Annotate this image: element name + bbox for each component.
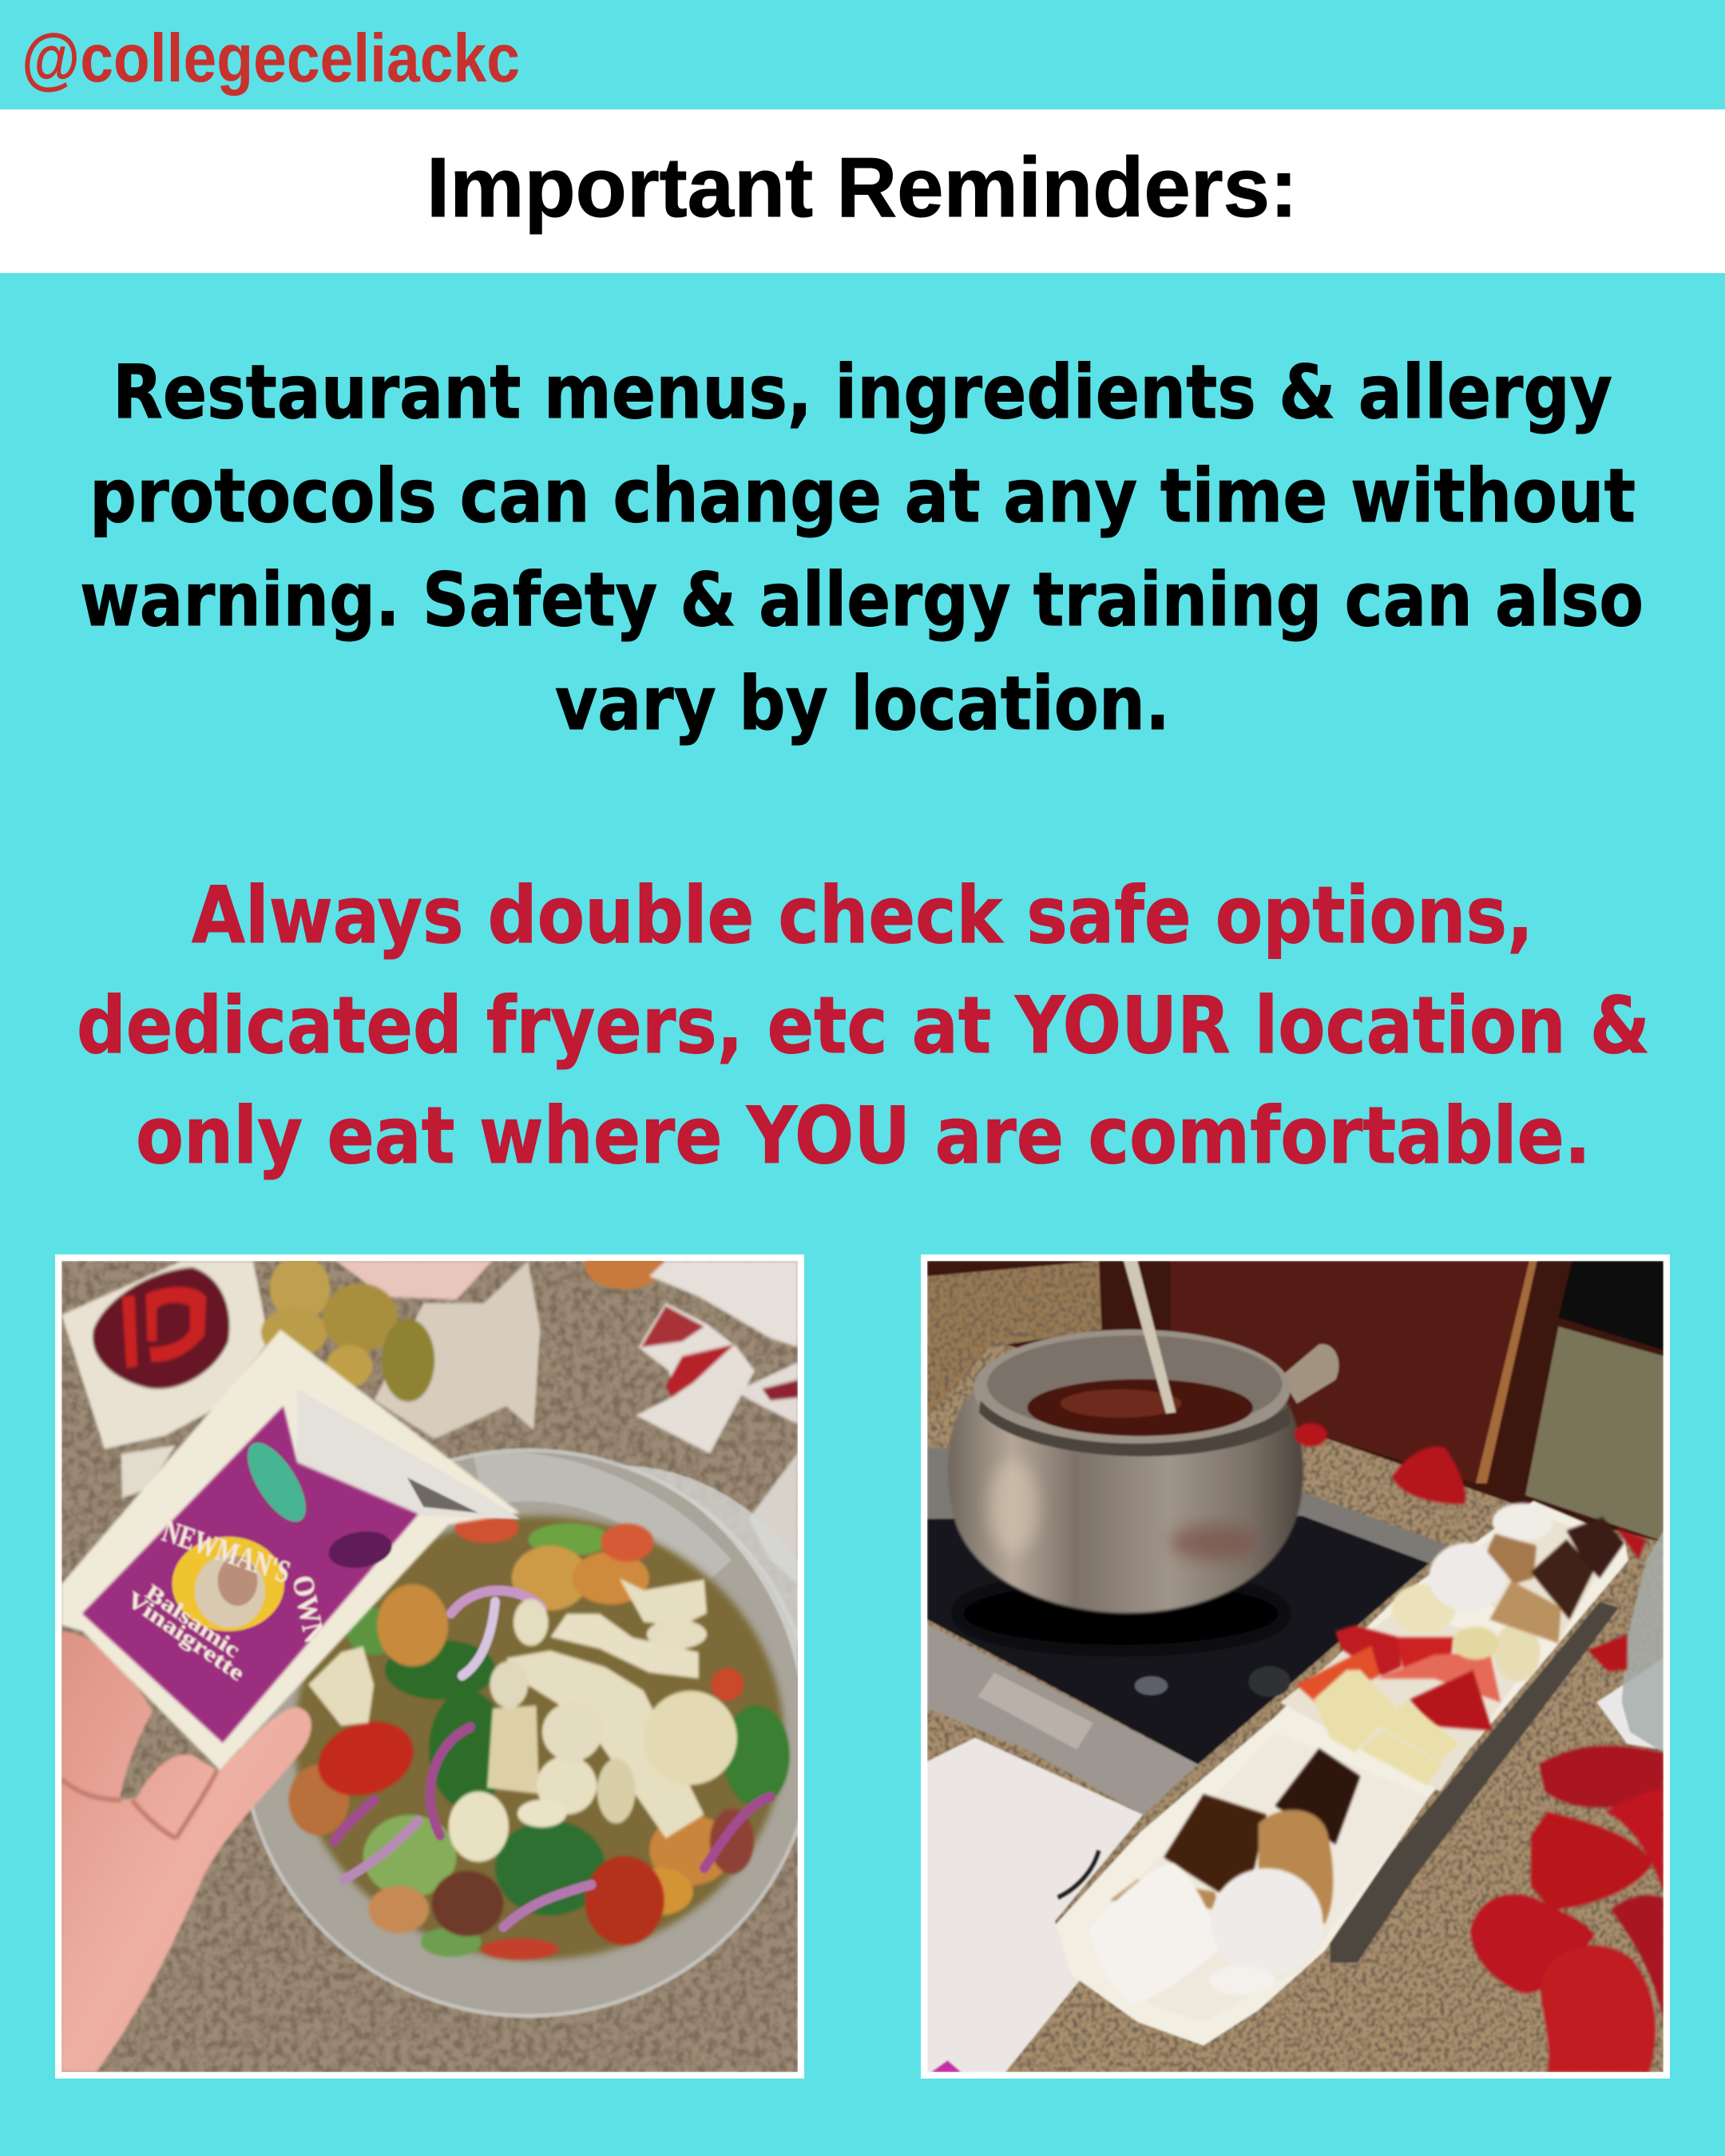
drinking glass: [1597, 1531, 1664, 1753]
grilled chicken: [308, 1578, 737, 1862]
granite counter: [927, 1261, 1664, 2072]
text block: reminder paragraph: [80, 349, 1644, 747]
packet label: [236, 1433, 316, 1532]
salad bowl: [242, 1450, 815, 2016]
hand: [61, 1631, 311, 2072]
bananas: [1314, 1584, 1541, 1785]
packet text: OWN: [286, 1572, 331, 1647]
red onion: [335, 1591, 771, 1927]
cup: [61, 1261, 269, 1498]
social handle: @collegeceliackc: [22, 21, 520, 97]
photo: chocolate fondue platter: [921, 1254, 1670, 2079]
rose petals: [1295, 1423, 1664, 2072]
fried tots and napkin: [261, 1255, 541, 1439]
tray shadow: [1330, 1602, 1619, 1963]
carpet: [61, 1261, 798, 2072]
dressing packet: [61, 1330, 520, 1770]
tomatoes: [311, 1512, 744, 1960]
wrappers: [585, 1242, 798, 1584]
title banner: [0, 109, 1725, 273]
text block: reminder paragraph: vary by location.: [555, 660, 1170, 747]
lettuce: [347, 1523, 790, 1956]
shredded cheese: [289, 1545, 754, 1936]
onion illustration: [327, 1528, 395, 1572]
marshmallows: [1089, 1863, 1322, 2005]
text block: red warning: only eat where YOU are comfortable.: [136, 1091, 1591, 1182]
strawberries: [1296, 1625, 1501, 1730]
top compartment treats: [1429, 1503, 1624, 1643]
packet text: NEWMAN'S: [158, 1514, 294, 1591]
brownies and grahams: [1110, 1749, 1360, 1924]
portrait: [172, 1536, 284, 1631]
booth wall: [927, 1261, 1664, 1545]
packet text: Balsamic: [141, 1579, 244, 1663]
packet text: Vinaigrette: [123, 1586, 248, 1686]
fondue pot: [948, 1330, 1338, 1649]
title banner: Important Reminders:: [426, 141, 1298, 235]
packet text: [123, 1514, 331, 1686]
text block: red warning: Always double check safe options,: [192, 870, 1533, 961]
serving tray: [1056, 1501, 1628, 2046]
napkin: [927, 1738, 1143, 2072]
photo: salad with dressing packet: [55, 1242, 815, 2079]
fondue fork: [1124, 1261, 1176, 1413]
text block: red warning: [77, 870, 1650, 1182]
induction burner: [927, 1448, 1449, 1815]
